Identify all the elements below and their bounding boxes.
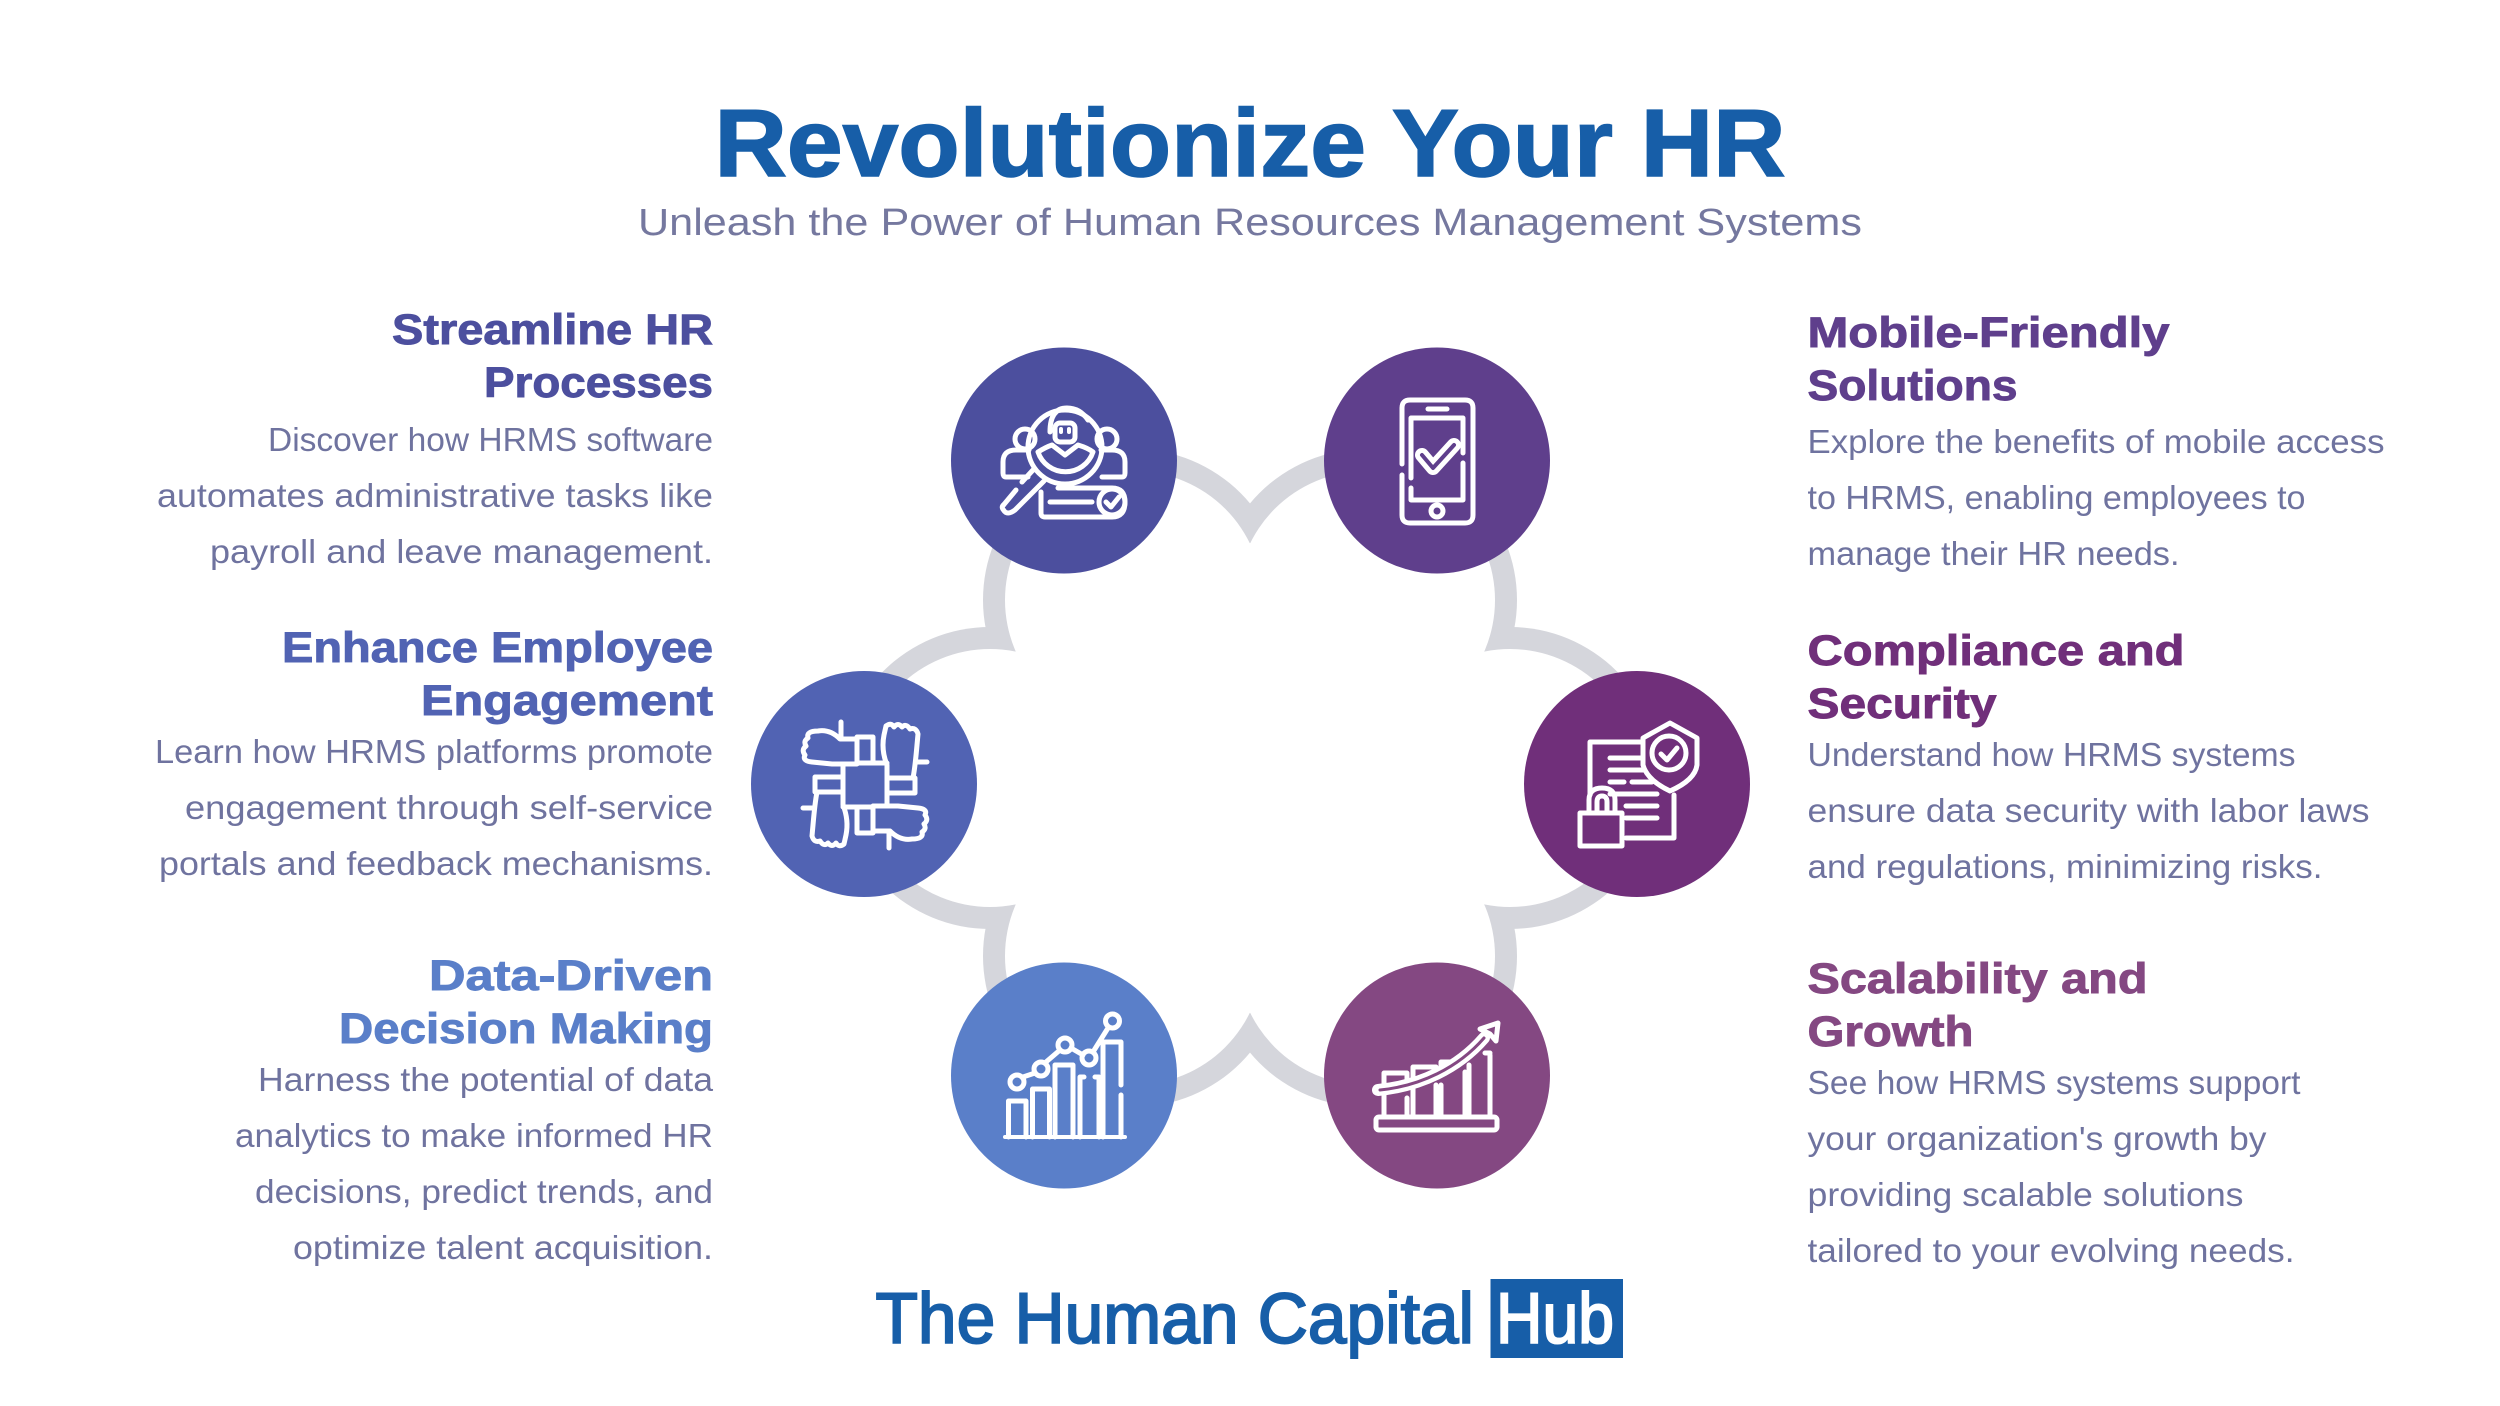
text block: Compliance description xyxy=(1808,736,2370,885)
heading: Mobile-Friendly Solutions: Mobile-Friendly xyxy=(1808,309,2170,357)
heading: Compliance and Security: Compliance and xyxy=(1808,627,2184,675)
icon: bar chart with trend line xyxy=(951,962,1177,1188)
text block: Data description: Harness the potential of data xyxy=(258,1061,714,1098)
heading: Enhance Employee Engagement: Enhance Employee xyxy=(282,624,713,672)
text block: Streamline description: Discover how HRMS software xyxy=(268,421,713,458)
panel: Mobile-Friendly Solutions xyxy=(1808,309,2384,572)
flower outline connecting the circles xyxy=(839,449,1661,1107)
panel: Data-Driven Decision Making xyxy=(235,952,714,1266)
logo: The Human Capital Hub: Hub xyxy=(1496,1280,1614,1359)
icon: hands teamwork xyxy=(751,671,977,897)
panel: Enhance Employee Engagement xyxy=(155,624,713,882)
text block: Compliance description: and regulations, minimizing risks. xyxy=(1808,848,2322,885)
text block: Streamline description: payroll and leave management. xyxy=(210,533,713,570)
text block: Data description xyxy=(235,1061,714,1266)
text block: Data description: optimize talent acquisition. xyxy=(293,1229,713,1266)
heading: Streamline HR Processes: Processes xyxy=(484,359,713,407)
text block: Scalability description xyxy=(1808,1064,2300,1269)
text block: Scalability description: providing scalable solutions xyxy=(1808,1176,2244,1213)
subtitle: Unleash the Power of Human Resources Management Systems xyxy=(638,202,1862,244)
icon: growth arrow over bars xyxy=(1324,962,1550,1188)
text block: Engagement description: Learn how HRMS platforms promote xyxy=(155,733,713,770)
heading: Scalability and Growth: Growth xyxy=(1808,1008,1974,1056)
text block: Engagement description: engagement through self-service xyxy=(185,789,713,826)
icon: recruitment search xyxy=(951,348,1177,574)
title: Revolutionize Your HR xyxy=(714,90,1786,197)
heading: Data-Driven Decision Making: Decision Making xyxy=(339,1005,713,1053)
text block: Streamline description xyxy=(157,421,713,570)
heading: Mobile-Friendly Solutions: Solutions xyxy=(1808,362,2018,410)
heading: Compliance and Security xyxy=(1808,627,2184,728)
text block: Compliance description: Understand how HRMS systems xyxy=(1808,736,2296,773)
heading: Data-Driven Decision Making xyxy=(339,952,713,1053)
heading: Enhance Employee Engagement xyxy=(282,624,713,725)
heading: Scalability and Growth xyxy=(1808,955,2148,1056)
panel: Streamline HR Processes xyxy=(157,306,713,570)
text block: Streamline description: automates administrative tasks like xyxy=(157,477,713,514)
heading: Enhance Employee Engagement: Engagement xyxy=(421,677,713,725)
heading: Compliance and Security: Security xyxy=(1808,680,1997,728)
heading: Scalability and Growth: Scalability and xyxy=(1808,955,2148,1003)
icon: compliance document shield lock xyxy=(1524,671,1750,897)
text block: Scalability description: See how HRMS systems support xyxy=(1808,1064,2300,1101)
heading: Streamline HR Processes: Streamline HR xyxy=(392,306,713,354)
heading: Data-Driven Decision Making: Data-Driven xyxy=(429,952,713,1000)
icon: mobile phone check xyxy=(1324,348,1550,574)
text block: Mobile description: manage their HR needs. xyxy=(1808,535,2180,572)
text block: Mobile description xyxy=(1808,423,2384,572)
text block: Data description: analytics to make informed HR xyxy=(235,1117,713,1154)
panel: Compliance and Security xyxy=(1808,627,2370,885)
heading: Streamline HR Processes xyxy=(392,306,713,407)
text block: Engagement description: portals and feedback mechanisms. xyxy=(159,845,713,882)
text block: Mobile description: to HRMS, enabling employees to xyxy=(1808,479,2306,516)
text block: Mobile description: Explore the benefits of mobile access xyxy=(1808,423,2384,460)
text block: Scalability description: your organization's growth by xyxy=(1808,1120,2267,1157)
logo: The Human Capital Hub: The Human Capital xyxy=(876,1280,1474,1359)
text block: Scalability description: tailored to your evolving needs. xyxy=(1808,1232,2294,1269)
text block: Compliance description: ensure data security with labor laws xyxy=(1808,792,2370,829)
heading: Mobile-Friendly Solutions xyxy=(1808,309,2170,410)
text block: Data description: decisions, predict trends, and xyxy=(255,1173,713,1210)
panel: Scalability and Growth xyxy=(1808,955,2300,1269)
text block: Engagement description xyxy=(155,733,713,882)
